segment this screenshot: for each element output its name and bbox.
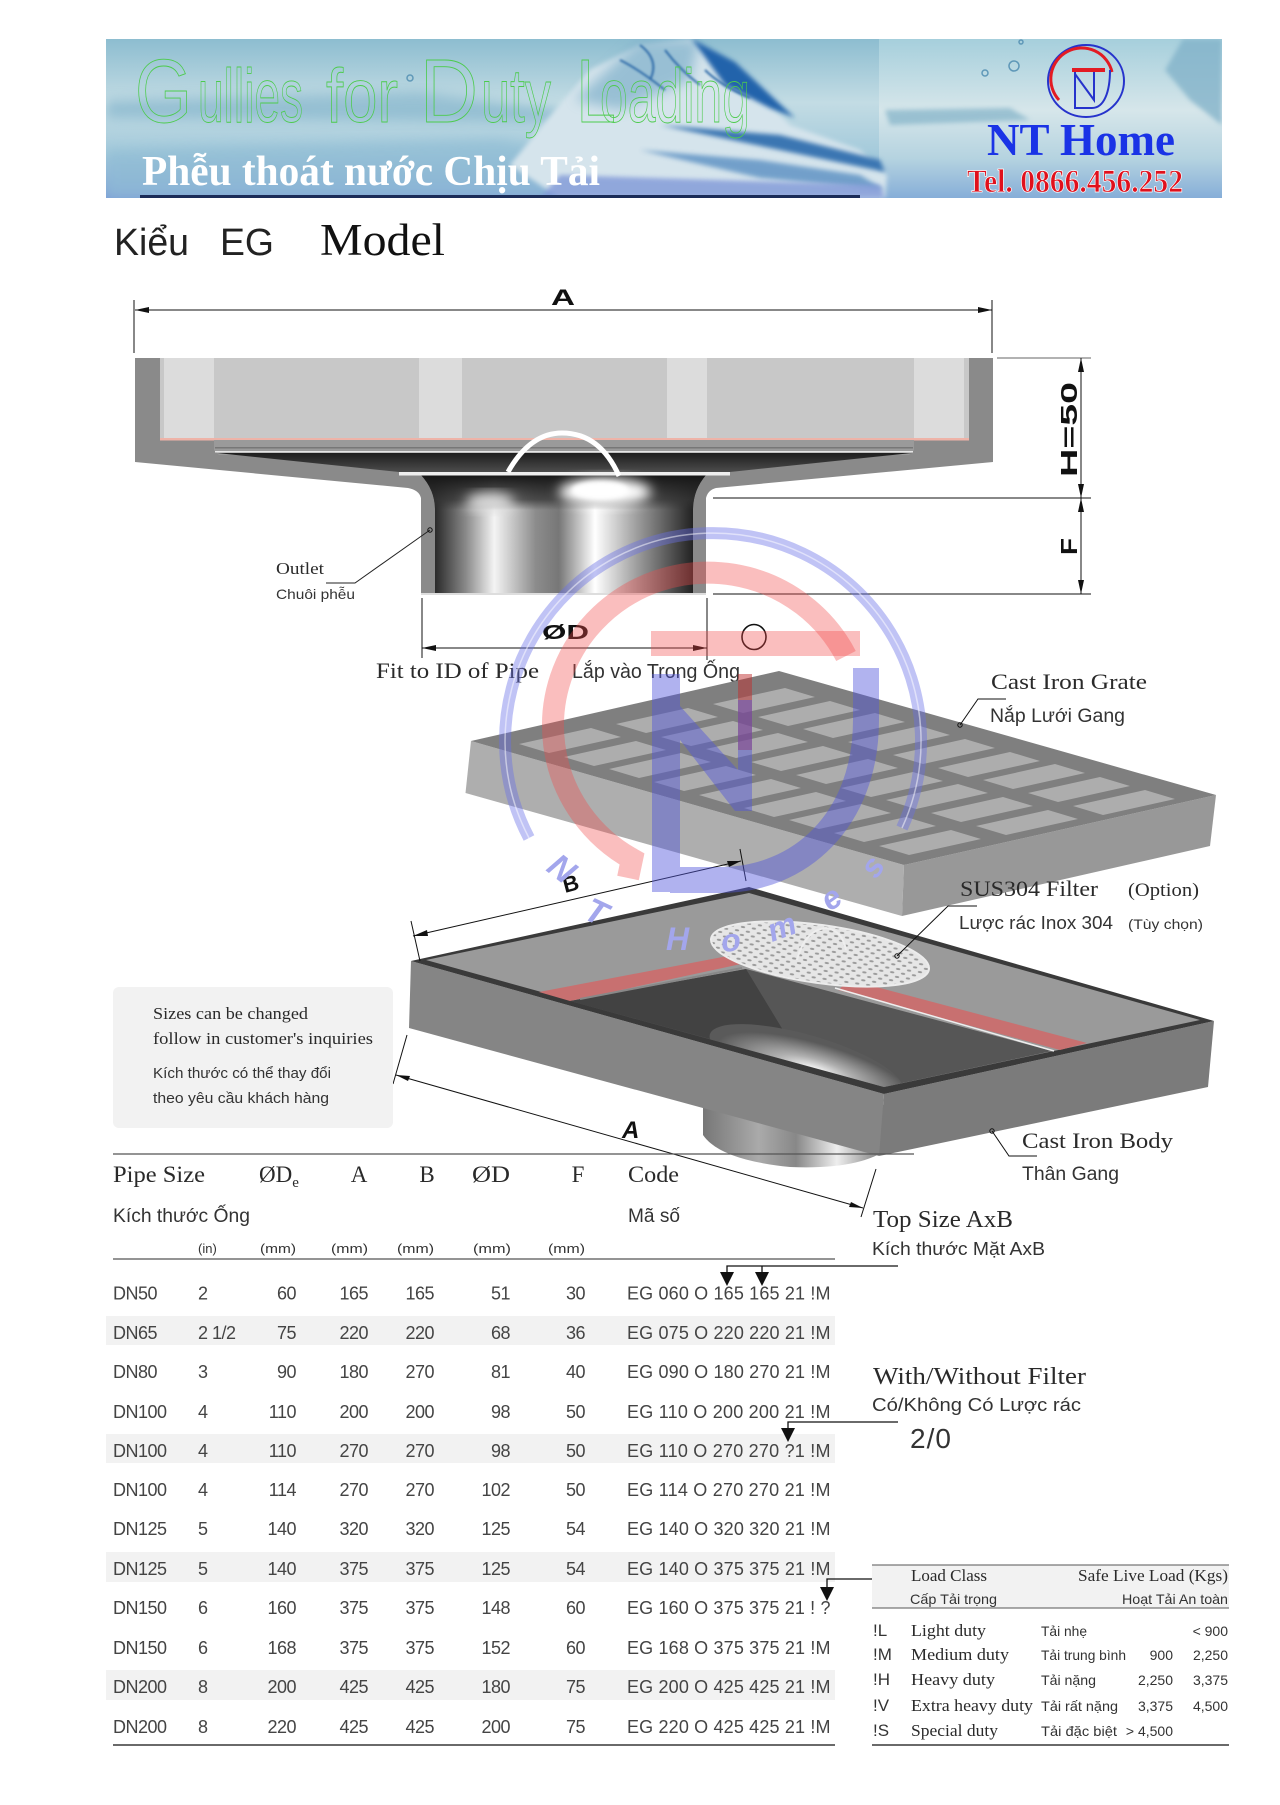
table header: B [419,1162,435,1187]
banner title: ullies [198,54,303,139]
heavy duty: 2,250 [1138,1672,1173,1688]
watermark logo: N [540,846,584,892]
row DN200 200: 200 [267,1677,296,1697]
extra heavy duty: Extra heavy duty [911,1696,1034,1715]
row DN150 168: 375 [405,1638,434,1658]
filter option label: With/Without Filter [873,1364,1086,1390]
row DN50: EG 060 O 165 165 21 !M [627,1284,830,1304]
banner logo [1048,45,1124,117]
banner title: G [135,42,192,142]
load table header [910,1566,1228,1607]
extra heavy duty [873,1696,1228,1715]
grate callout [958,669,1147,727]
table header: (mm) [260,1241,296,1256]
note box [113,987,393,1128]
row DN80 [113,1362,830,1382]
special duty [873,1721,1173,1740]
row DN100 114: 4 [198,1480,208,1500]
light duty [873,1621,1228,1640]
filter option label: 2/0 [910,1423,951,1454]
body callout [990,1128,1173,1185]
heading: Kiểu [114,222,189,264]
row DN50: 2 [198,1284,208,1304]
row DN100 110 200: EG 110 O 200 200 21 !M [627,1402,830,1422]
medium duty: Tải trung bình [1041,1647,1126,1663]
banner title: oading [600,54,750,139]
table header: Code [628,1162,679,1187]
grate callout: Cast Iron Grate [991,669,1147,694]
row DN100 114: EG 114 O 270 270 21 !M [627,1480,830,1500]
dimensions H and F [713,358,1091,594]
row DN65 [113,1323,830,1343]
row DN80: 81 [491,1362,510,1382]
row DN200 220: EG 220 O 425 425 21 !M [627,1717,830,1737]
row DN125 320: 320 [339,1519,368,1539]
row DN200 200: 425 [405,1677,434,1697]
table header: (mm) [397,1241,434,1256]
row DN125 320: EG 140 O 320 320 21 !M [627,1519,830,1539]
note box: theo yêu cầu khách hàng [153,1091,329,1107]
row DN200 220: 425 [339,1717,368,1737]
row DN200 200: 8 [198,1677,208,1697]
filter callout [895,876,1203,958]
row DN125 375: DN125 [113,1559,167,1579]
row DN65: 220 [339,1323,368,1343]
row DN100 110 200: 98 [491,1402,510,1422]
table header: (in) [198,1241,217,1256]
heavy duty: !H [873,1670,890,1689]
table header: F [572,1162,584,1187]
heavy duty: Heavy duty [911,1670,996,1689]
load class table [872,1565,1229,1745]
dimensions H and F: H=50 [1056,382,1082,477]
fit to pipe note: Fit to ID of Pipe [376,658,539,683]
banner title [135,42,750,142]
extra heavy duty: Tải rất nặng [1041,1698,1118,1714]
filter option label [872,1364,1086,1454]
row DN80: DN80 [113,1362,158,1382]
row DN100 110 270: 4 [198,1441,208,1461]
row DN100 114: 114 [269,1480,296,1500]
row DN150 168: EG 168 O 375 375 21 !M [627,1638,830,1658]
extra heavy duty: 3,375 [1138,1698,1173,1714]
medium duty: Medium duty [911,1645,1010,1664]
note box: Kích thước có thể thay đổi [153,1066,331,1082]
heading: Model [320,215,445,265]
medium duty: !M [873,1645,892,1664]
banner title: D [420,42,478,142]
row DN125 320 [113,1519,830,1539]
row DN100 110 270: 98 [491,1441,510,1461]
medium duty: 900 [1150,1647,1173,1663]
table header [113,1162,680,1256]
row DN125 320: DN125 [113,1519,167,1539]
dimension A perspective: A [621,1117,639,1144]
outlet callout [276,528,432,602]
fit to pipe note: Lắp vào Trong Ống [572,659,740,683]
row DN200 200: 425 [339,1677,368,1697]
table header: (mm) [473,1241,511,1256]
row DN65: 68 [491,1323,510,1343]
dimension A top [134,285,992,353]
arrow: top size to code [720,1266,898,1286]
brand name: NT Home [987,114,1175,165]
heading: EG [220,222,274,264]
row DN150 168: DN150 [113,1638,167,1658]
phone number: Tel. 0866.456.252 [967,164,1183,200]
banner title: L [576,42,616,142]
section drawing [134,285,1091,683]
row DN200 220: 8 [198,1717,208,1737]
row DN150 168: 6 [198,1638,208,1658]
row DN100 110 270: EG 110 O 270 270 ?1 !M [627,1441,830,1461]
arrow: filter to code [781,1422,898,1442]
row DN65: 75 [277,1323,296,1343]
watermark logo: o [719,921,742,959]
body illustration [409,887,1214,1167]
banner subtitle: Phễu thoát nước Chịu Tải [142,149,600,195]
row DN100 110 270: 50 [566,1441,585,1461]
row DN200 220: 425 [405,1717,434,1737]
row DN200 200: EG 200 O 425 425 21 !M [627,1677,830,1697]
note box: Sizes can be changed [153,1004,309,1023]
row DN125 320: 140 [267,1519,296,1539]
dimensions H and F: F [1056,538,1082,555]
row DN100 110 200: 110 [269,1402,296,1422]
outlet callout: Chuôi phễu [276,586,355,602]
row DN50 [113,1284,830,1304]
fit to pipe note [376,658,740,683]
watermark logo: m [762,905,801,949]
body callout: Cast Iron Body [1022,1128,1173,1153]
heavy duty [873,1670,1228,1689]
row DN125 375 [113,1559,830,1579]
special duty: Tải đặc biệt [1041,1723,1117,1739]
dimension B: B [560,870,582,898]
row DN100 110 200: 200 [405,1402,434,1422]
row DN200 200: DN200 [113,1677,167,1697]
row DN80: EG 090 O 180 270 21 !M [627,1362,830,1382]
light duty: < 900 [1193,1623,1228,1639]
row DN100 110 200: 200 [339,1402,368,1422]
watermark logo: H [666,921,690,957]
top size label: Kích thước Mặt AxB [872,1239,1045,1259]
row DN80: 40 [566,1362,585,1382]
extra heavy duty: 4,500 [1193,1698,1228,1714]
row DN100 114: DN100 [113,1480,167,1500]
row DN100 110 270 [113,1441,830,1461]
row DN150 168 [113,1638,830,1658]
heavy duty: 3,375 [1193,1672,1228,1688]
row DN65: 220 [405,1323,434,1343]
row DN125 320: 5 [198,1519,208,1539]
row DN125 375: 125 [481,1559,510,1579]
dimension OD: ØD [542,622,589,644]
row DN100 110 200: 50 [566,1402,585,1422]
watermark logo: T [579,891,616,935]
table header: ØD [259,1162,292,1187]
row DN125 375: 140 [267,1559,296,1579]
medium duty [873,1645,1228,1664]
row DN65: DN65 [113,1323,158,1343]
dimension A perspective [393,1035,876,1217]
gully body section [135,358,993,595]
top size label [872,1207,1045,1259]
row DN200 220: 200 [481,1717,510,1737]
special duty: > 4,500 [1126,1723,1173,1739]
banner title: for [326,54,398,139]
row DN125 375: 54 [566,1559,585,1579]
load table header: Load Class [911,1566,987,1585]
row DN50: 60 [277,1284,296,1304]
heading [114,215,445,265]
row DN80: 90 [277,1362,296,1382]
row DN100 110 270: 270 [405,1441,434,1461]
grate illustration [466,671,1216,916]
light duty: Tải nhẹ [1041,1623,1087,1639]
row DN200 200: 75 [566,1677,585,1697]
row DN65: 36 [566,1323,585,1343]
row DN150 160: 6 [198,1598,208,1618]
banner title: uty [481,54,551,139]
filter callout: (Tùy chọn) [1128,916,1203,932]
load table header: Safe Live Load (Kgs) [1078,1566,1228,1585]
row DN50: 165 [405,1284,434,1304]
row DN100 114: 270 [405,1480,434,1500]
table header: (mm) [548,1241,585,1256]
row DN100 110 200: DN100 [113,1402,167,1422]
table header: ØD [472,1162,510,1187]
row DN150 160: 148 [481,1598,510,1618]
row DN200 220 [113,1717,830,1737]
row DN80: 3 [198,1362,208,1382]
light duty: Light duty [911,1621,987,1640]
row DN100 114: 50 [566,1480,585,1500]
size table [106,1154,914,1745]
body callout: Thân Gang [1022,1164,1119,1185]
row DN125 375: 5 [198,1559,208,1579]
filter callout: Lược rác Inox 304 [959,913,1113,933]
medium duty: 2,250 [1193,1647,1228,1663]
row DN150 160: 375 [405,1598,434,1618]
row DN100 110 270: DN100 [113,1441,167,1461]
heavy duty: Tải nặng [1041,1672,1096,1688]
table header: e [292,1175,299,1191]
outlet callout: Outlet [276,559,324,578]
row DN125 320: 320 [405,1519,434,1539]
row DN50: 51 [491,1284,510,1304]
extra heavy duty: !V [873,1696,890,1715]
note box: follow in customer's inquiries [153,1029,373,1048]
row DN100 110 270: 110 [269,1441,296,1461]
row DN100 114: 102 [481,1480,510,1500]
load table header: Hoạt Tải An toàn [1122,1591,1228,1607]
row DN100 114 [113,1480,830,1500]
watermark logo: e [813,878,849,918]
row DN50: 30 [566,1284,585,1304]
filter callout: (Option) [1128,880,1199,901]
row DN50: DN50 [113,1284,158,1304]
row DN150 168: 60 [566,1638,585,1658]
table header: A [351,1162,368,1187]
dimension B [411,849,746,961]
filter option label: Có/Không Có Lược rác [872,1395,1081,1415]
grate callout: Nắp Lưới Gang [990,705,1125,727]
top size label: Top Size AxB [873,1207,1013,1233]
row DN50: 165 [339,1284,368,1304]
row DN100 110 200 [113,1402,830,1422]
watermark logo: s [852,849,892,884]
row DN125 320: 125 [481,1519,510,1539]
arrow: load class to code [820,1579,898,1601]
row DN150 160: 60 [566,1598,585,1618]
row DN150 168: 152 [481,1638,510,1658]
row DN150 160: 375 [339,1598,368,1618]
row DN150 160 [113,1598,830,1618]
dimension A top: A [551,285,575,310]
row DN125 375: 375 [339,1559,368,1579]
row DN80: 270 [405,1362,434,1382]
table header: Pipe Size [113,1162,205,1187]
watermark logo [505,533,921,959]
special duty: Special duty [911,1721,999,1740]
row DN125 320: 54 [566,1519,585,1539]
row DN200 220: 220 [267,1717,296,1737]
row DN150 168: 375 [339,1638,368,1658]
row DN150 160: DN150 [113,1598,167,1618]
row DN150 160: EG 160 O 375 375 21 ! ? [627,1598,830,1618]
table header: (mm) [331,1241,368,1256]
dimension OD [422,598,766,660]
row DN150 168: 168 [267,1638,296,1658]
load table header: Cấp Tải trọng [910,1591,997,1607]
row DN100 110 200: 4 [198,1402,208,1422]
row DN100 114: 270 [339,1480,368,1500]
row DN200 200: 180 [481,1677,510,1697]
filter callout: SUS304 Filter [960,876,1099,901]
row DN200 220: DN200 [113,1717,167,1737]
table header: Mã số [628,1206,680,1227]
row DN100 110 270: 270 [339,1441,368,1461]
row DN200 200 [113,1677,830,1697]
row DN125 375: 375 [405,1559,434,1579]
outlet pipe [703,1105,889,1167]
row DN200 220: 75 [566,1717,585,1737]
table header: Kích thước Ống [113,1205,250,1227]
row DN150 160: 160 [267,1598,296,1618]
row DN65: EG 075 O 220 220 21 !M [627,1323,830,1343]
light duty: !L [873,1621,887,1640]
special duty: !S [873,1721,889,1740]
filter disc [707,910,933,998]
row DN80: 180 [339,1362,368,1382]
row DN65: 2 1/2 [198,1323,236,1343]
banner [106,39,1222,200]
row DN125 375: EG 140 O 375 375 21 !M [627,1559,830,1579]
